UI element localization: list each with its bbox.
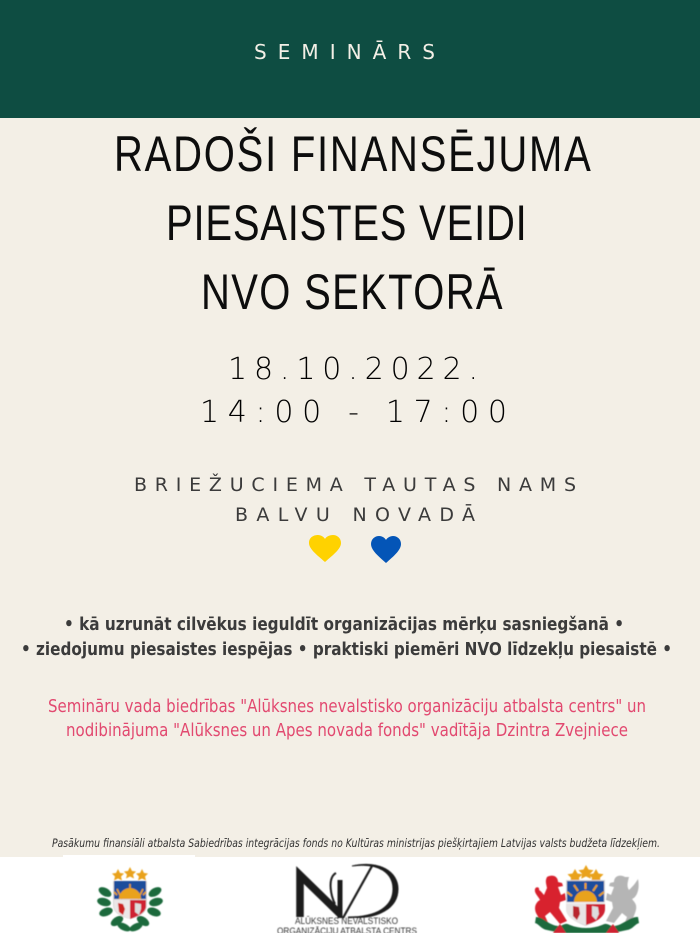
venue: BALVU NOVADĀ <box>235 502 475 526</box>
logo: large Latvian coat of arms <box>535 865 639 933</box>
venue: BRIEŽUCIEMA TAUTAS NAMS <box>134 473 576 496</box>
logo: NVO support centre <box>277 864 417 933</box>
seminar topics: • kā uzrunāt cilvēkus ieguldīt organizācijas mērķu sasniegšanā • <box>64 615 624 635</box>
date and time <box>200 352 507 430</box>
logo: small Latvian coat of arms <box>96 867 164 933</box>
title: PIESAISTES VEIDI <box>166 195 527 251</box>
icon: yellow heart <box>309 535 341 562</box>
logo: NVO support centre: ALŪKSNES NEVALSTISKO <box>295 916 398 927</box>
seminar topics <box>21 615 672 660</box>
venue <box>134 473 576 526</box>
title: RADOŠI FINANSĒJUMA <box>114 126 592 182</box>
header label: SEMINĀRS <box>254 40 435 64</box>
title <box>114 126 592 320</box>
header band <box>0 0 700 118</box>
icon: blue heart <box>371 536 401 563</box>
title: NVO SEKTORĀ <box>201 264 503 320</box>
date and time: 18.10.2022. <box>228 352 478 387</box>
seminar leader <box>48 697 646 741</box>
logo strip <box>0 855 700 933</box>
date and time: 14:00 - 17:00 <box>200 395 507 430</box>
